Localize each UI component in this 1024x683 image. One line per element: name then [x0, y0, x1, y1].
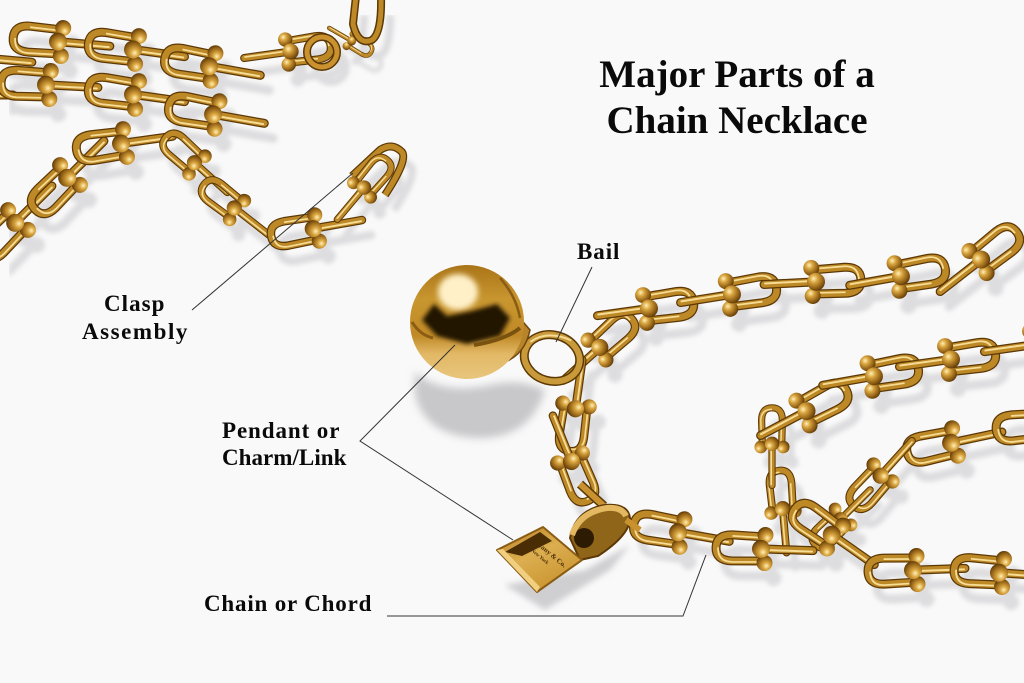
label: pendant or charm/link: Charm/Link [222, 445, 347, 470]
label: clasp assembly: Assembly [82, 319, 188, 344]
padlock charm [497, 505, 640, 592]
label: clasp assembly [82, 291, 188, 344]
padlock charm: New York [530, 549, 549, 566]
pendant sphere [410, 265, 530, 379]
label: pendant or charm/link [222, 418, 347, 470]
title: Chain Necklace [606, 99, 868, 142]
padlock shadow [505, 545, 630, 610]
label: chain or chord: Chain or Chord [204, 591, 372, 616]
leader line: bail [556, 267, 592, 342]
label: clasp assembly: Clasp [104, 291, 165, 316]
bail ring [519, 329, 585, 387]
label: pendant or charm/link: Pendant or [222, 418, 340, 443]
title: Major Parts of a [599, 53, 875, 96]
leader line: clasp [192, 173, 353, 310]
pendant sphere shadow [415, 372, 545, 438]
leader lines: pendant and charm [360, 345, 513, 540]
padlock charm: Tiffany & Co. [531, 536, 568, 569]
label: bail: Bail [577, 239, 620, 264]
leader line: chain [387, 555, 706, 616]
drop chain lower links [580, 484, 604, 506]
title [599, 53, 875, 142]
